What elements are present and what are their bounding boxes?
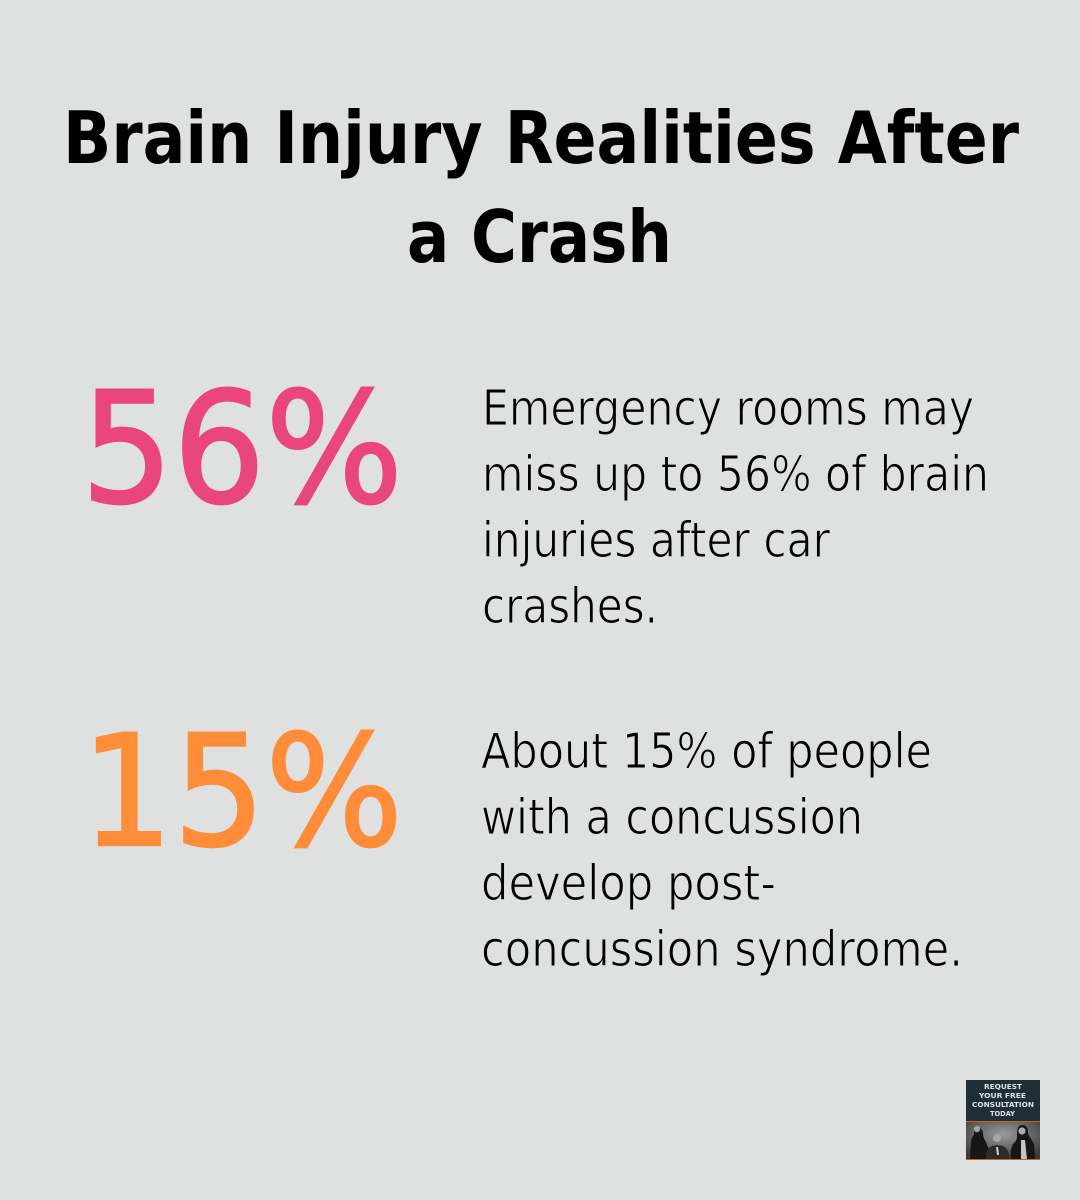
text block: emergency rooms: Emergency rooms may: [482, 380, 974, 437]
text block: post-concussion: About 15% of people: [481, 723, 932, 780]
consultation badge: REQUEST: [984, 1082, 1022, 1091]
consultation badge: CONSULTATION: [972, 1100, 1034, 1109]
statistic: 15%: 15%: [81, 703, 403, 882]
consultation badge: TODAY: [990, 1109, 1016, 1118]
text block: post-concussion: concussion syndrome.: [481, 921, 963, 978]
text block: emergency rooms: injuries after car: [482, 512, 831, 569]
title: [63, 96, 1019, 279]
title: a Crash: [407, 195, 672, 279]
text block: emergency rooms: crashes.: [482, 578, 658, 635]
text block: emergency rooms: [482, 380, 989, 635]
text block: post-concussion: [481, 723, 963, 978]
text block: post-concussion: develop post-: [481, 855, 776, 912]
consultation badge: [966, 1080, 1040, 1160]
text block: emergency rooms: miss up to 56% of brain: [482, 446, 989, 503]
consultation badge: YOUR FREE: [978, 1091, 1026, 1100]
text block: post-concussion: with a concussion: [481, 789, 863, 846]
statistic: 56%: 56%: [81, 360, 403, 539]
